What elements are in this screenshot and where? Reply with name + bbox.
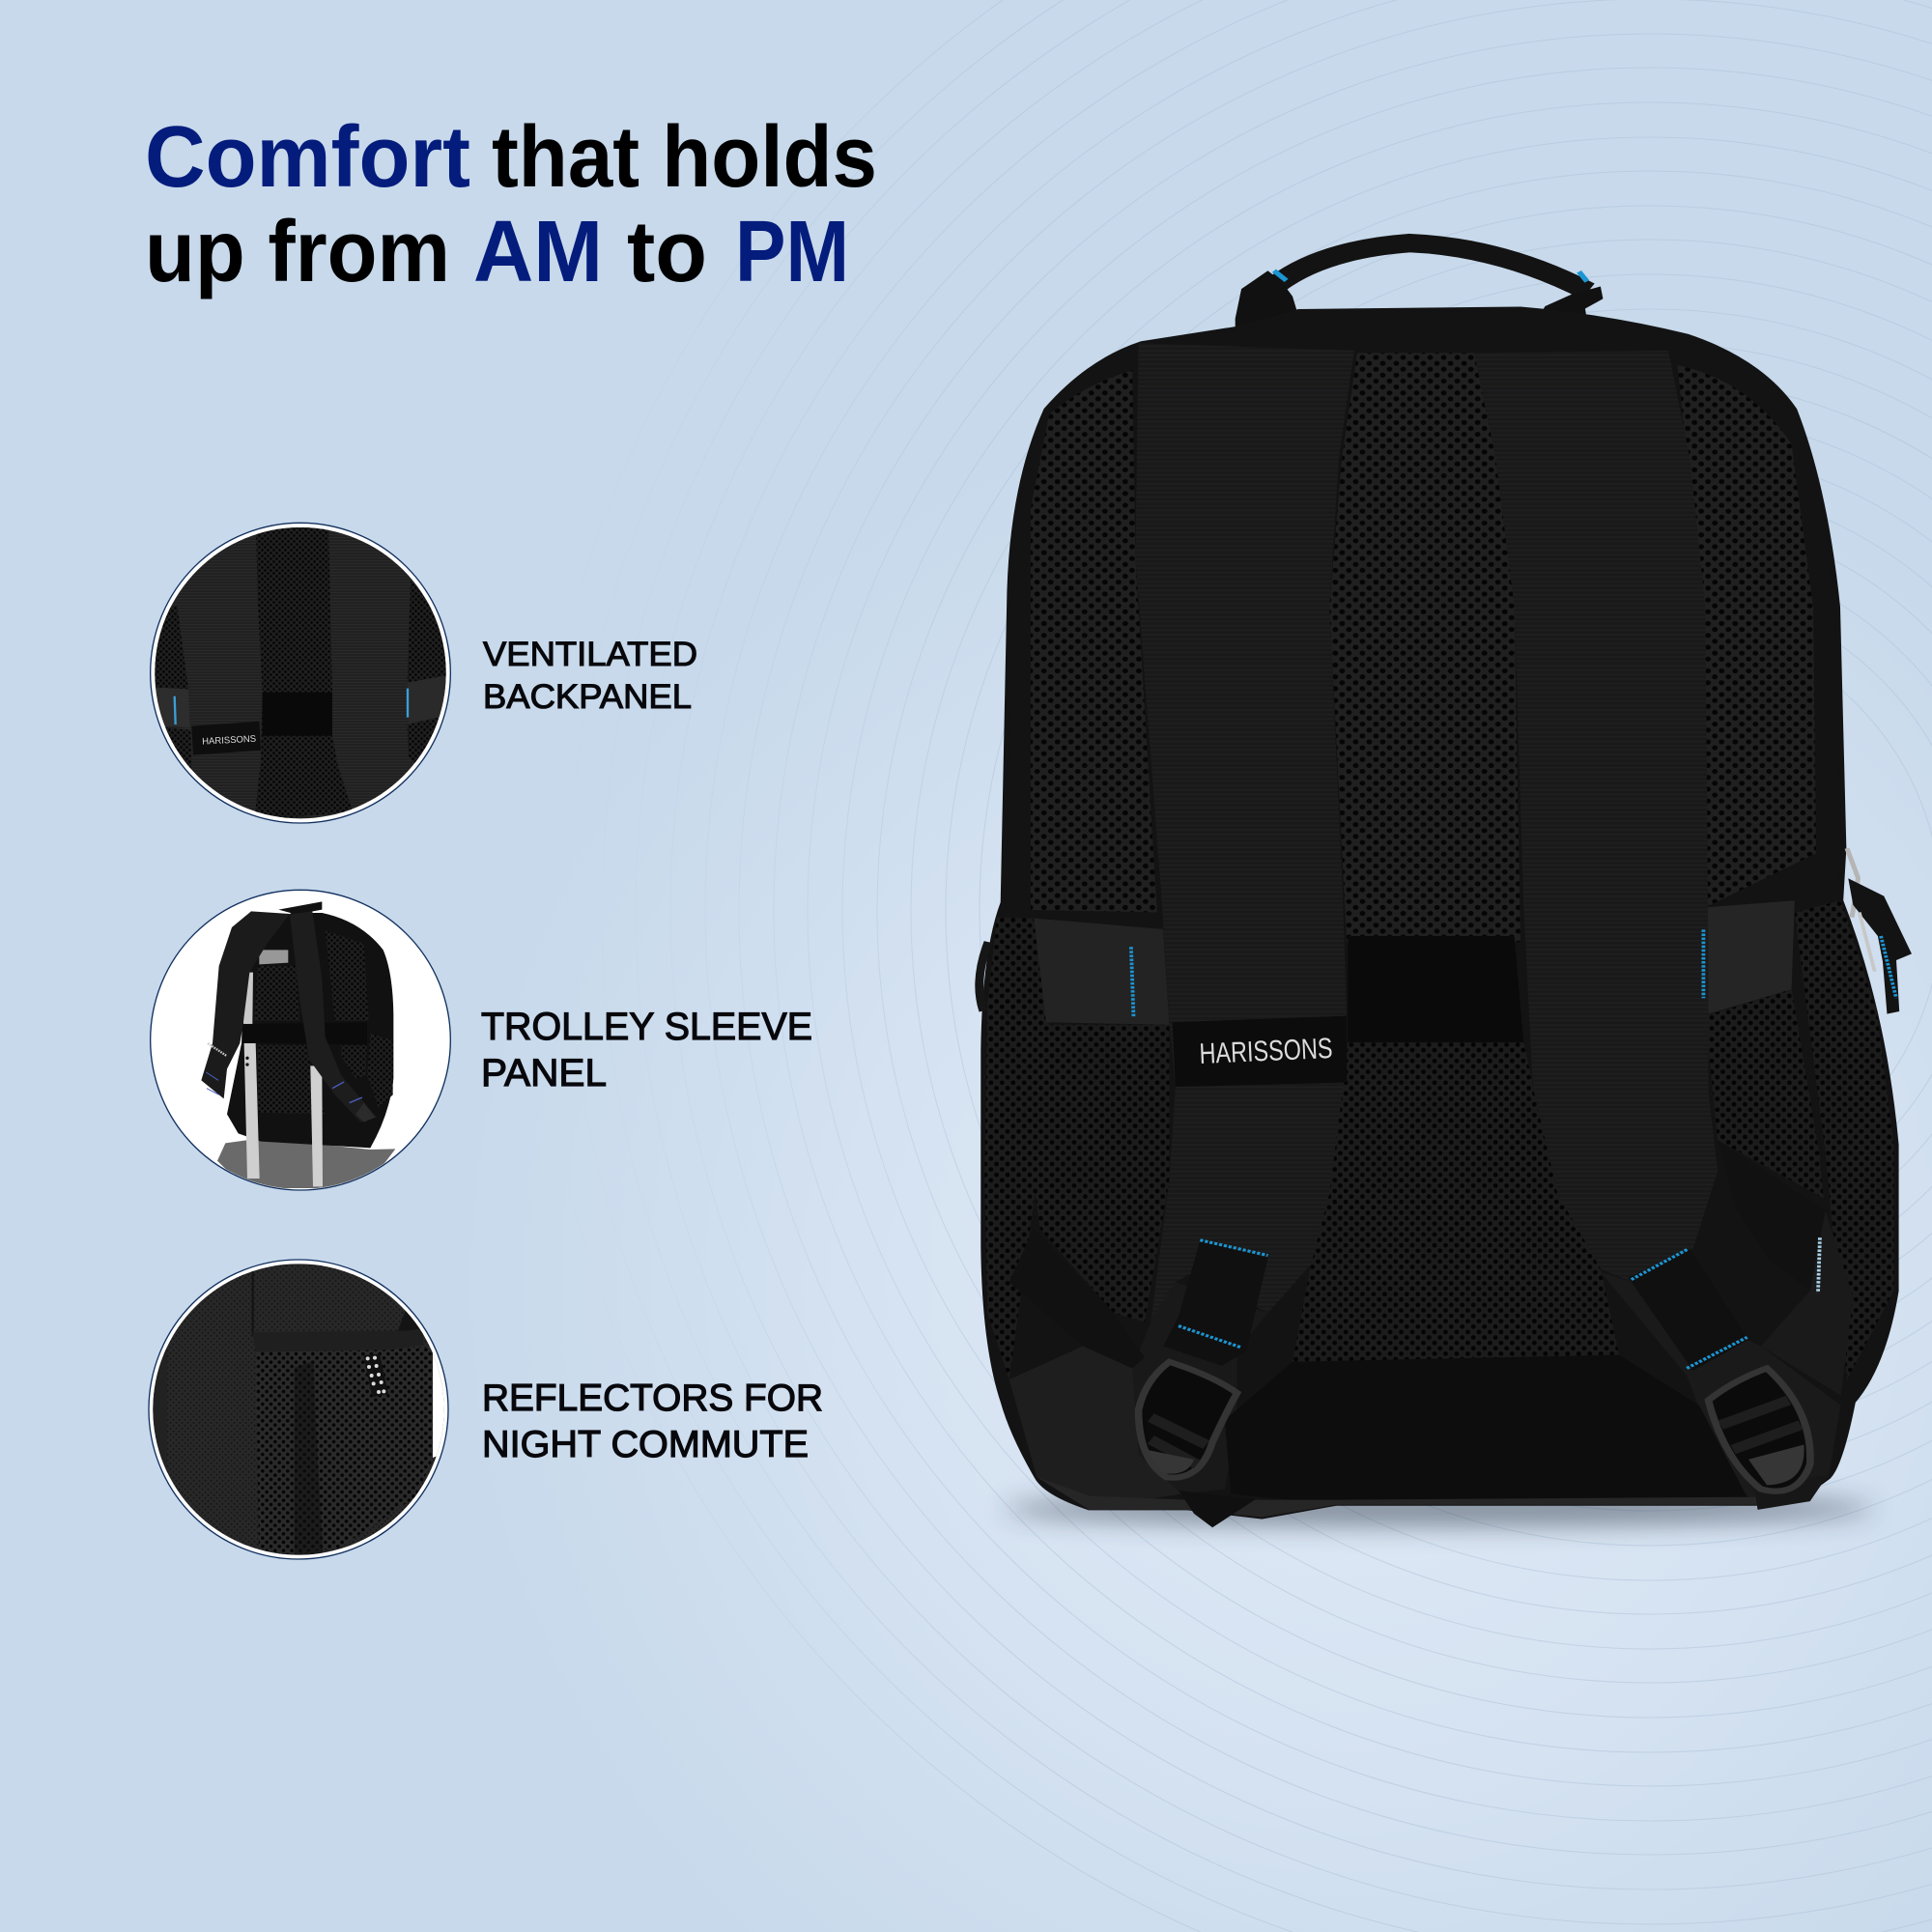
title: PM: [735, 204, 849, 300]
left side mesh: [1028, 1025, 1169, 1321]
thumbnail: ventilated backpanel: HARISSONS: [202, 734, 256, 748]
right shoulder strap: [1474, 351, 1718, 1282]
left lower padding: [1132, 1282, 1268, 1494]
right side loop strap: [1718, 1140, 1826, 1291]
lower left pad: [1009, 1346, 1181, 1508]
label: reflectors for night commute: NIGHT COMMUTE: [482, 1424, 809, 1465]
zipper pulls: [1847, 848, 1912, 1014]
brand label text: HARISSONS: [1199, 1033, 1333, 1070]
bottom base: [1037, 1477, 1761, 1517]
lower centre mesh: [1293, 1042, 1619, 1362]
title: up from: [145, 204, 450, 300]
thumbnail: ventilated backpanel: [148, 522, 454, 828]
left bottom tab: [1179, 1491, 1256, 1527]
right bottom tab: [1754, 1474, 1829, 1510]
title: to: [627, 204, 707, 300]
left grey side panel: [1034, 919, 1169, 1025]
backpack: [980, 243, 1912, 1527]
bottom black pad: [1225, 1355, 1748, 1504]
title: [145, 109, 877, 300]
label: ventilated backpanel: [483, 636, 697, 716]
lower right pad: [1601, 1272, 1841, 1501]
left buckle: [1139, 1362, 1237, 1478]
left side loop strap: [1009, 1229, 1145, 1368]
left shoulder strap: [1135, 343, 1354, 1321]
label: trolley sleeve panel: PANEL: [481, 1052, 607, 1094]
right upper mesh: [1678, 365, 1816, 907]
left upper mesh: [1031, 370, 1157, 912]
label: trolley sleeve panel: [481, 1006, 812, 1094]
label: reflectors for night commute: REFLECTORS FOR: [482, 1378, 823, 1419]
label: ventilated backpanel: BACKPANEL: [483, 678, 692, 716]
label: reflectors for night commute: [482, 1378, 823, 1465]
thumbnail: reflectors: [146, 1258, 452, 1564]
right side mesh: [1705, 989, 1824, 1198]
right lower webbing: [1629, 1249, 1748, 1371]
right grey side panel: [1705, 900, 1795, 1014]
far right mesh: [1795, 900, 1893, 1379]
title: Comfort: [145, 109, 470, 206]
label: ventilated backpanel: VENTILATED: [483, 636, 697, 673]
right side dark panel: [1761, 1211, 1853, 1395]
far left mesh: [984, 918, 1049, 1379]
title: that holds: [492, 109, 877, 206]
blue stitching: [1131, 929, 1896, 1368]
thumbnail: trolley sleeve panel: [151, 890, 450, 1190]
title: AM: [473, 204, 603, 300]
backpack floor shadow: [1005, 1492, 1874, 1526]
centre band: [1348, 936, 1523, 1042]
brand label panel: [1173, 1016, 1347, 1087]
centre mesh: [1329, 353, 1520, 942]
left lower webbing: [1163, 1240, 1268, 1366]
left side loop ring: [980, 942, 988, 1011]
carry handle: [1236, 243, 1603, 336]
right buckle: [1709, 1368, 1810, 1492]
backpack body: [983, 308, 1896, 1517]
label: trolley sleeve panel: TROLLEY SLEEVE: [481, 1006, 812, 1048]
